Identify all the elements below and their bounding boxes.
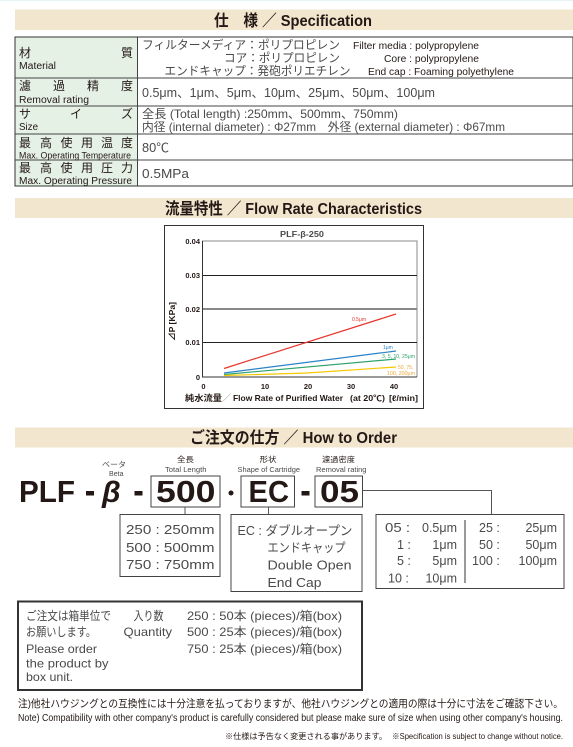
- row: material: コア：ポリプロピレン: [224, 51, 340, 65]
- panel: quantity note: ご注文は箱単位で: [26, 608, 111, 623]
- panel: removal rating options: 10μm: [425, 572, 457, 586]
- y axis labels: 0.04: [185, 237, 201, 246]
- panel: quantity note: お願いします。: [26, 625, 96, 639]
- row: size: [19, 106, 505, 134]
- code: 500 total length: 全長: [177, 454, 195, 464]
- panel: removal rating options: [376, 514, 564, 588]
- row: max operating temperature: [19, 135, 169, 162]
- row: material: エンドキャップ：発砲ポリエチレン: [164, 64, 350, 78]
- panel: quantity note: 入り数: [134, 608, 164, 623]
- panel: quantity note: 250 : 50本 (pieces)/箱(box): [187, 608, 342, 623]
- panel: removal rating options: 0.5μm: [422, 521, 457, 535]
- line: 0.5 um: [224, 314, 396, 368]
- line: 3, 5, 10, 25 um: 3, 5, 10, 25μm: [382, 354, 415, 360]
- panel: cartridge shape options: End Cap: [268, 576, 322, 590]
- panel: removal rating options: 10 :: [388, 572, 409, 586]
- x axis labels: 0: [201, 382, 206, 391]
- panel: removal rating options: 100μm: [519, 554, 557, 568]
- heading: Flow Rate Characteristics: [15, 198, 573, 218]
- row: max operating pressure: 使: [60, 160, 73, 175]
- panel: cartridge shape options: Double Open: [268, 558, 352, 572]
- heading: How to Order: ご注文の仕方 ／ How to Order: [190, 428, 397, 447]
- code: 500 total length: Total Length: [165, 465, 206, 474]
- order code: [19, 454, 366, 509]
- code: 05 removal rating: [315, 454, 366, 509]
- panel: quantity note: box unit.: [26, 670, 73, 684]
- panel: quantity note: the product by: [26, 656, 108, 670]
- panel: removal rating options: 1μm: [432, 538, 457, 552]
- row: max operating temperature: 高: [40, 136, 52, 150]
- panel: cartridge shape options: EC : ダブルオープン: [238, 523, 352, 538]
- panel: quantity note: 500 : 25本 (pieces)/箱(box): [187, 624, 342, 639]
- row: material: 材: [19, 46, 31, 60]
- x axis labels: 40: [390, 382, 398, 391]
- row: size: ズ: [121, 106, 133, 121]
- chart title: PLF-β-250: [280, 230, 325, 239]
- panel: quantity note: [18, 602, 362, 690]
- panel: removal rating options: 1 :: [397, 538, 411, 552]
- x axis labels: [201, 382, 398, 391]
- row: removal rating: 精: [87, 79, 99, 93]
- panel: specification table: [15, 37, 573, 187]
- y axis labels: 0.03: [185, 271, 200, 280]
- row: max operating temperature: 温: [101, 136, 113, 150]
- row: max operating temperature: Max. Operating Temperature: [19, 150, 131, 162]
- row: max operating pressure: 圧: [101, 161, 113, 175]
- y axis labels: 0.01: [185, 338, 200, 347]
- row: max operating pressure: 最: [19, 161, 31, 175]
- heading: Specification: [15, 10, 573, 30]
- code: beta: β: [101, 476, 121, 509]
- panel: total length options: 500 : 500mm: [126, 541, 214, 555]
- note: specification change: ※Specification is subject to change without notice.: [392, 732, 563, 741]
- row: max operating temperature: 80℃: [142, 141, 169, 155]
- row: material: フィルターメディア：ポリプロピレン: [142, 37, 340, 52]
- row: removal rating: 濾: [19, 78, 31, 93]
- x axis title: ／: [222, 393, 231, 403]
- row: size: 内径 (internal diameter) : Φ27mm 外径 (external diameter) : Φ67mm: [142, 120, 505, 134]
- row: removal rating: 0.5μm、1μm、5μm、10μm、25μm、50μm、100μm: [142, 86, 435, 100]
- panel: quantity note: Please order: [26, 642, 97, 656]
- x axis title: Flow Rate of Purified Water: [233, 393, 344, 403]
- code: EC shape: EC: [248, 474, 289, 509]
- dash: [302, 491, 310, 496]
- row: max operating pressure: 0.5MPa: [142, 167, 189, 181]
- code: 05 removal rating: 濾過密度: [322, 454, 356, 464]
- row: removal rating: 度: [121, 79, 133, 93]
- line: 50, 75, 100, 200 um: 100, 200μm: [387, 371, 415, 377]
- panel: removal rating options: 25μm: [525, 521, 557, 535]
- x axis title: 純水流量: [185, 393, 223, 403]
- line: 1 um: [224, 345, 396, 373]
- x axis labels: 10: [261, 382, 269, 391]
- heading: How to Order: [15, 428, 573, 448]
- panel: removal rating options: 05 :: [385, 521, 410, 535]
- row: max operating temperature: 最: [19, 136, 31, 150]
- note: compatibility: [18, 697, 563, 724]
- line: 1 um: 1μm: [383, 345, 393, 351]
- row: size: サ: [19, 107, 31, 121]
- code: beta: [101, 460, 126, 509]
- code: beta: ベータ: [102, 460, 126, 469]
- panel: total length options: 250 : 250mm: [126, 523, 214, 537]
- line: 3, 5, 10, 25 um: [224, 354, 415, 374]
- row: max operating pressure: 高: [40, 161, 52, 175]
- x axis labels: 20: [304, 382, 312, 391]
- panel: removal rating options: 5μm: [432, 554, 457, 568]
- row: removal rating: 過: [53, 79, 65, 93]
- note: specification change: [225, 731, 563, 741]
- connectors: [185, 490, 492, 514]
- row: material: Material: [19, 61, 56, 72]
- row: removal rating: [19, 78, 435, 106]
- row: max operating temperature: 使: [60, 135, 73, 150]
- code: 05 removal rating: 05: [320, 474, 359, 509]
- note: specification change: ※仕様は予告なく変更される事があります。: [225, 731, 387, 741]
- heading: Flow Rate Characteristics: 流量特性 ／ Flow Rate Characteristics: [165, 199, 422, 218]
- row: max operating temperature: 度: [121, 136, 133, 150]
- panel: removal rating options: 100 :: [472, 554, 500, 568]
- y axis title: ⊿P [KPa]: [167, 302, 177, 341]
- row: max operating pressure: Max. Operating Pressure: [19, 176, 132, 187]
- row: material: 質: [121, 45, 133, 60]
- panel: removal rating options: 25 :: [479, 521, 500, 535]
- line: 0.5 um: 0.5μm: [352, 317, 366, 323]
- row: max operating pressure: 力: [121, 161, 133, 175]
- dot: [228, 490, 234, 496]
- row: material: Filter media : polypropylene: [353, 41, 479, 52]
- row: size: Size: [19, 122, 38, 133]
- code: EC shape: [238, 454, 300, 509]
- y axis labels: 0: [196, 373, 200, 382]
- line: 50, 75, 100, 200 um: [224, 365, 415, 377]
- panel: quantity note: Quantity: [124, 625, 172, 639]
- y axis labels: [185, 237, 201, 382]
- code: EC shape: 形状: [260, 454, 277, 464]
- x axis title: [ℓ/min]: [389, 394, 418, 403]
- row: max operating pressure: 用: [81, 161, 93, 175]
- panel: cartridge shape options: エンドキャップ: [268, 541, 346, 555]
- x axis labels: 30: [347, 382, 355, 391]
- code: PLF: PLF: [19, 474, 75, 509]
- plot frame and grid: [202, 241, 417, 377]
- panel: removal rating options: 50μm: [525, 538, 557, 552]
- dash: [86, 491, 94, 496]
- y axis labels: 0.02: [185, 305, 200, 314]
- code: 500 total length: [151, 454, 220, 509]
- row: material: [19, 37, 514, 78]
- panel: total length options: 750 : 750mm: [126, 558, 214, 572]
- panel: removal rating options: 5 :: [397, 554, 411, 568]
- row: material: Core : polypropylene: [384, 54, 479, 65]
- code: beta: Beta: [109, 471, 124, 478]
- line: 50, 75, 100, 200 um: 50, 75,: [398, 365, 413, 371]
- row: max operating temperature: 用: [81, 136, 93, 150]
- code: 05 removal rating: Removal rating: [316, 465, 366, 474]
- dash: [134, 491, 142, 496]
- heading: Specification: 仕 様 ／ Specification: [214, 11, 372, 30]
- code: 500 total length: 500: [156, 474, 216, 509]
- x axis title: (at 20℃): [350, 394, 385, 403]
- x axis title: [185, 393, 418, 403]
- row: size: 全長 (Total length) :250mm、500mm、750mm): [142, 107, 398, 121]
- panel: total length options: [120, 514, 220, 576]
- row: max operating pressure: [19, 160, 189, 187]
- panel: removal rating options: 50 :: [479, 538, 500, 552]
- row: size: イ: [70, 107, 82, 121]
- panel: quantity note: 750 : 25本 (pieces)/箱(box): [187, 641, 342, 656]
- code: EC shape: Shape of Cartridge: [238, 465, 300, 474]
- panel: cartridge shape options: [231, 514, 362, 592]
- row: removal rating: Removal rating: [19, 95, 89, 106]
- row: material: End cap : Foaming polyethylene: [368, 67, 514, 78]
- panel: flow rate chart: [164, 226, 424, 408]
